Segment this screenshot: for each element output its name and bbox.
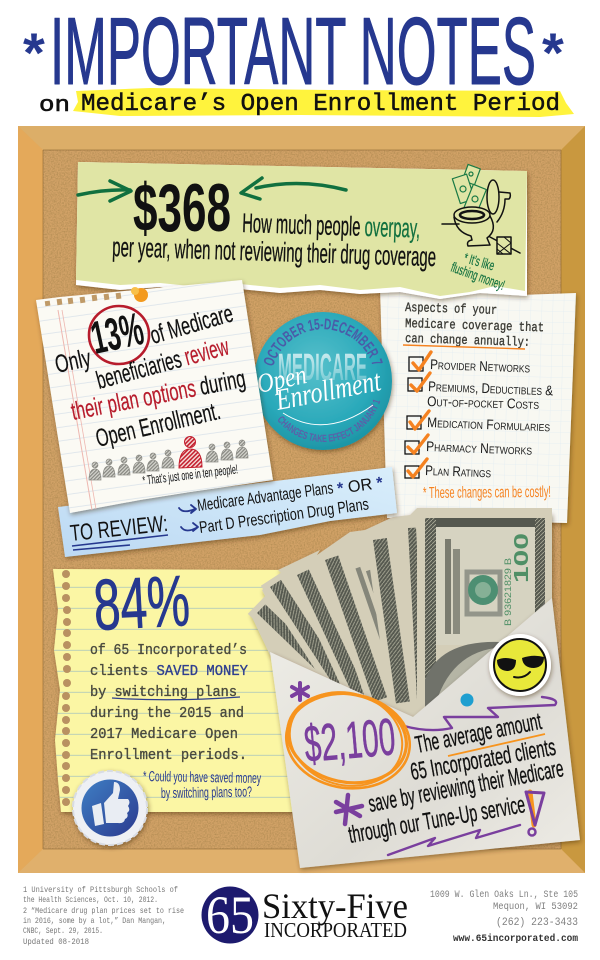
bill 1 <box>248 584 371 705</box>
heading: aspects of your coverage: Aspects of your <box>405 300 497 318</box>
sticker: sunglasses face <box>489 634 551 696</box>
text: only 13% of Medicare: Open Enrollment. <box>93 397 223 453</box>
contact details: (262) 223-3433 <box>496 917 578 929</box>
text: 84% description: by switching plans <box>90 685 237 701</box>
illustration: fan of hundred dollar bills <box>248 508 552 720</box>
logo: Sixty-Five Incorporated: Sixty-Five <box>262 886 408 926</box>
footnotes <box>23 885 184 947</box>
text: plan options: Medicare Advantage Plans <box>196 479 334 515</box>
icon: exclamation mark <box>526 792 544 836</box>
bill 3 <box>288 554 391 708</box>
arrow: left-pointing green <box>241 178 346 199</box>
text: plan options <box>196 474 385 537</box>
text: 84% description <box>90 643 248 764</box>
checklist text: Plan Ratings <box>425 462 492 480</box>
badge: Medicare Open Enrollment button <box>254 311 396 455</box>
badge: Medicare Open Enrollment button: CHANGES TAKE EFFECT JANUARY 1 <box>278 400 380 442</box>
checklist text <box>425 356 554 480</box>
corkboard frame <box>18 126 585 873</box>
bill 5 <box>365 528 440 713</box>
text: 84% description: Enrollment periods. <box>90 748 247 764</box>
front bill: 100 <box>511 533 533 583</box>
orange circle around amount <box>279 679 416 799</box>
text: the average amount <box>346 708 566 849</box>
arrow: right-pointing green <box>78 181 131 201</box>
panel: to review blue note <box>58 467 397 557</box>
panel: 13% torn white note <box>36 280 273 513</box>
badge: Medicare Open Enrollment button: OCTOBER 15-DECEMBER 7 <box>264 318 383 366</box>
text: it's like flushing money: flushing money! <box>449 259 507 293</box>
text: plan options: Part D Prescription Drug Plans <box>198 495 370 537</box>
stars <box>292 683 362 824</box>
title: Important Notes: * <box>542 21 564 84</box>
checklist text: Pharmacy Networks <box>426 438 533 458</box>
stat: 84%: 84% <box>92 561 192 646</box>
text: plan options: * OR * <box>336 474 385 498</box>
checklist boxes and ticks <box>405 352 431 478</box>
checklist text: Premiums, Deductibles & <box>428 378 554 398</box>
footnotes: 1 University of Pittsburgh Schools of <box>23 885 178 895</box>
subtitle: on Medicare's Open Enrollment Period: Medicare’s Open Enrollment Period <box>81 91 560 118</box>
logo: Sixty-Five Incorporated <box>202 885 408 945</box>
panel: $2,100 envelope <box>270 598 580 868</box>
heading: aspects of your coverage: can change annually: <box>405 331 530 350</box>
contact details <box>430 889 578 945</box>
badge: Medicare Open Enrollment button: MEDICARE <box>278 347 367 389</box>
icon row: one in ten people <box>89 436 248 480</box>
text: 84% description: 2017 Medicare Open <box>90 727 238 743</box>
panel: 84% yellow note <box>53 561 300 812</box>
front bill: B 93621829 B <box>503 558 513 626</box>
text: how much people overpay: How much people overpay, <box>242 208 421 244</box>
panel: $368 green note <box>76 162 527 299</box>
footnotes: Updated 08-2018 <box>23 937 89 947</box>
purple scribbles <box>388 697 556 855</box>
text: it's like flushing money <box>449 250 507 293</box>
text: only 13% of Medicare: Only <box>52 344 94 379</box>
spiral holes <box>62 570 71 806</box>
logo: Sixty-Five Incorporated: INCORPORATED <box>264 918 407 942</box>
heading: aspects of your coverage: Medicare coverage that <box>405 316 544 335</box>
bill 6 <box>401 519 433 710</box>
checklist text: Medication Formularies <box>427 414 551 434</box>
bill 2 <box>261 563 367 696</box>
red circle around stat <box>89 306 149 364</box>
text: only 13% of Medicare: beneficiaries review <box>93 332 232 395</box>
heading: to review: TO REVIEW: <box>69 510 169 546</box>
text: 84% description: clients SAVED MONEY <box>90 664 248 680</box>
text: 84% description: of 65 Incorporated’s <box>90 643 247 659</box>
text: could you have saved money: by switching plans too? <box>161 784 252 802</box>
text: 84% description: during the 2015 and <box>90 706 244 722</box>
logo: Sixty-Five Incorporated: 65 <box>206 885 254 945</box>
front bill <box>417 508 552 718</box>
badge: Medicare Open Enrollment button: Open <box>254 359 309 399</box>
stat: 13%: 13% <box>86 302 148 364</box>
text: only 13% of Medicare: of Medicare <box>147 299 236 350</box>
panel: aspects checklist note <box>380 288 576 523</box>
checklist text: Out-of-pocket Costs <box>427 393 540 412</box>
footnotes: in 2016, some by a lot,” Dan Mangan, <box>23 916 166 926</box>
icon: toilet flushing money <box>442 164 520 254</box>
icon: blue pushpin <box>460 694 474 706</box>
icon: orange pushpin <box>131 287 148 302</box>
bill 4 <box>316 538 427 717</box>
text: could you have saved money: * Could you have saved money <box>143 769 262 787</box>
blue arrows <box>179 505 198 531</box>
footnotes: the Health Sciences, Oct. 10, 2012. <box>23 895 158 905</box>
stat: $2,100: $2,100 <box>302 708 398 774</box>
text: that's just one in ten people: * That’s just one in ten people! <box>142 461 239 488</box>
text: only 13% of Medicare: their plan options during <box>69 365 248 426</box>
title: Important Notes: * <box>23 21 45 84</box>
contact details: www.65incorporated.com <box>453 933 578 945</box>
torn binder holes <box>45 293 121 306</box>
checklist text: Provider Networks <box>430 356 531 375</box>
stat: $368: $368 <box>133 170 231 246</box>
subtitle: on Medicare's Open Enrollment Period: on <box>39 93 70 118</box>
icon: thumbs up badge <box>73 771 147 845</box>
text: could you have saved money <box>143 769 262 802</box>
contact details: Mequon, WI 53092 <box>493 901 578 913</box>
footnotes: 2 “Medicare drug plan prices set to rise <box>23 906 184 916</box>
text: it's like flushing money: * It’s like <box>462 250 497 273</box>
heading: aspects of your coverage <box>405 300 544 350</box>
footnotes: CNBC, Sept. 29, 2015. <box>23 926 103 936</box>
text: only 13% of Medicare <box>52 299 248 453</box>
badge: Medicare Open Enrollment button: Enrollment <box>272 364 384 417</box>
